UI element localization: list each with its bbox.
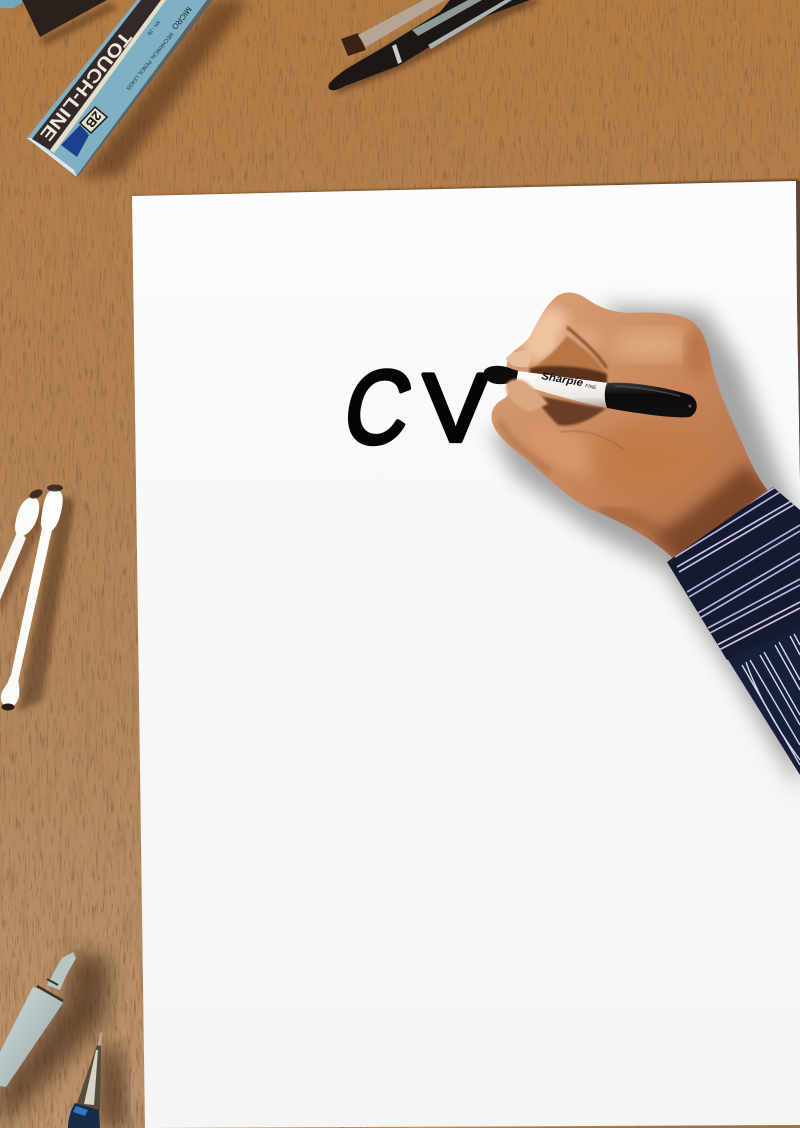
marker cap — [605, 383, 697, 417]
gap below marker — [532, 395, 606, 426]
letter C: C — [336, 349, 420, 465]
marker — [484, 366, 697, 417]
label: 2B: 2B — [83, 109, 105, 131]
hand base — [492, 292, 775, 565]
shirt sleeve and cuff — [667, 478, 800, 775]
pencil two — [68, 1032, 102, 1128]
label: MICRO: MICRO — [170, 5, 193, 31]
index fingertip — [506, 351, 534, 367]
cotton swabs — [0, 484, 75, 712]
letter V: V — [423, 353, 488, 462]
gap above marker — [530, 366, 607, 385]
hand and arm drop shadow — [490, 305, 800, 790]
pencil one — [0, 938, 82, 1087]
marker tip — [484, 366, 522, 384]
left swab — [0, 487, 44, 600]
label: grade line: XH - 2B — [145, 19, 161, 37]
blue tube on desk corner — [0, 0, 118, 46]
marker body — [516, 371, 608, 408]
label: TOUCH-LINE: TOUCH-LINE — [36, 28, 136, 145]
hand holding marker — [484, 292, 775, 565]
handwritten CV — [336, 349, 488, 465]
paint brushes — [328, 0, 545, 95]
mechanical pencils — [0, 938, 128, 1128]
marker fine point label: FINE — [585, 383, 598, 391]
lead box TOUCH-LINE — [27, 0, 250, 180]
thumb over marker — [506, 379, 548, 412]
hand shading — [500, 299, 775, 565]
sheet of white paper — [130, 179, 800, 1128]
right swab — [1, 484, 63, 710]
label: pencil leads: MECHANICAL PENCIL LEADS — [124, 31, 174, 91]
sleeve — [727, 625, 800, 775]
cuff — [667, 478, 800, 660]
marker brand: Sharpie — [540, 370, 584, 389]
